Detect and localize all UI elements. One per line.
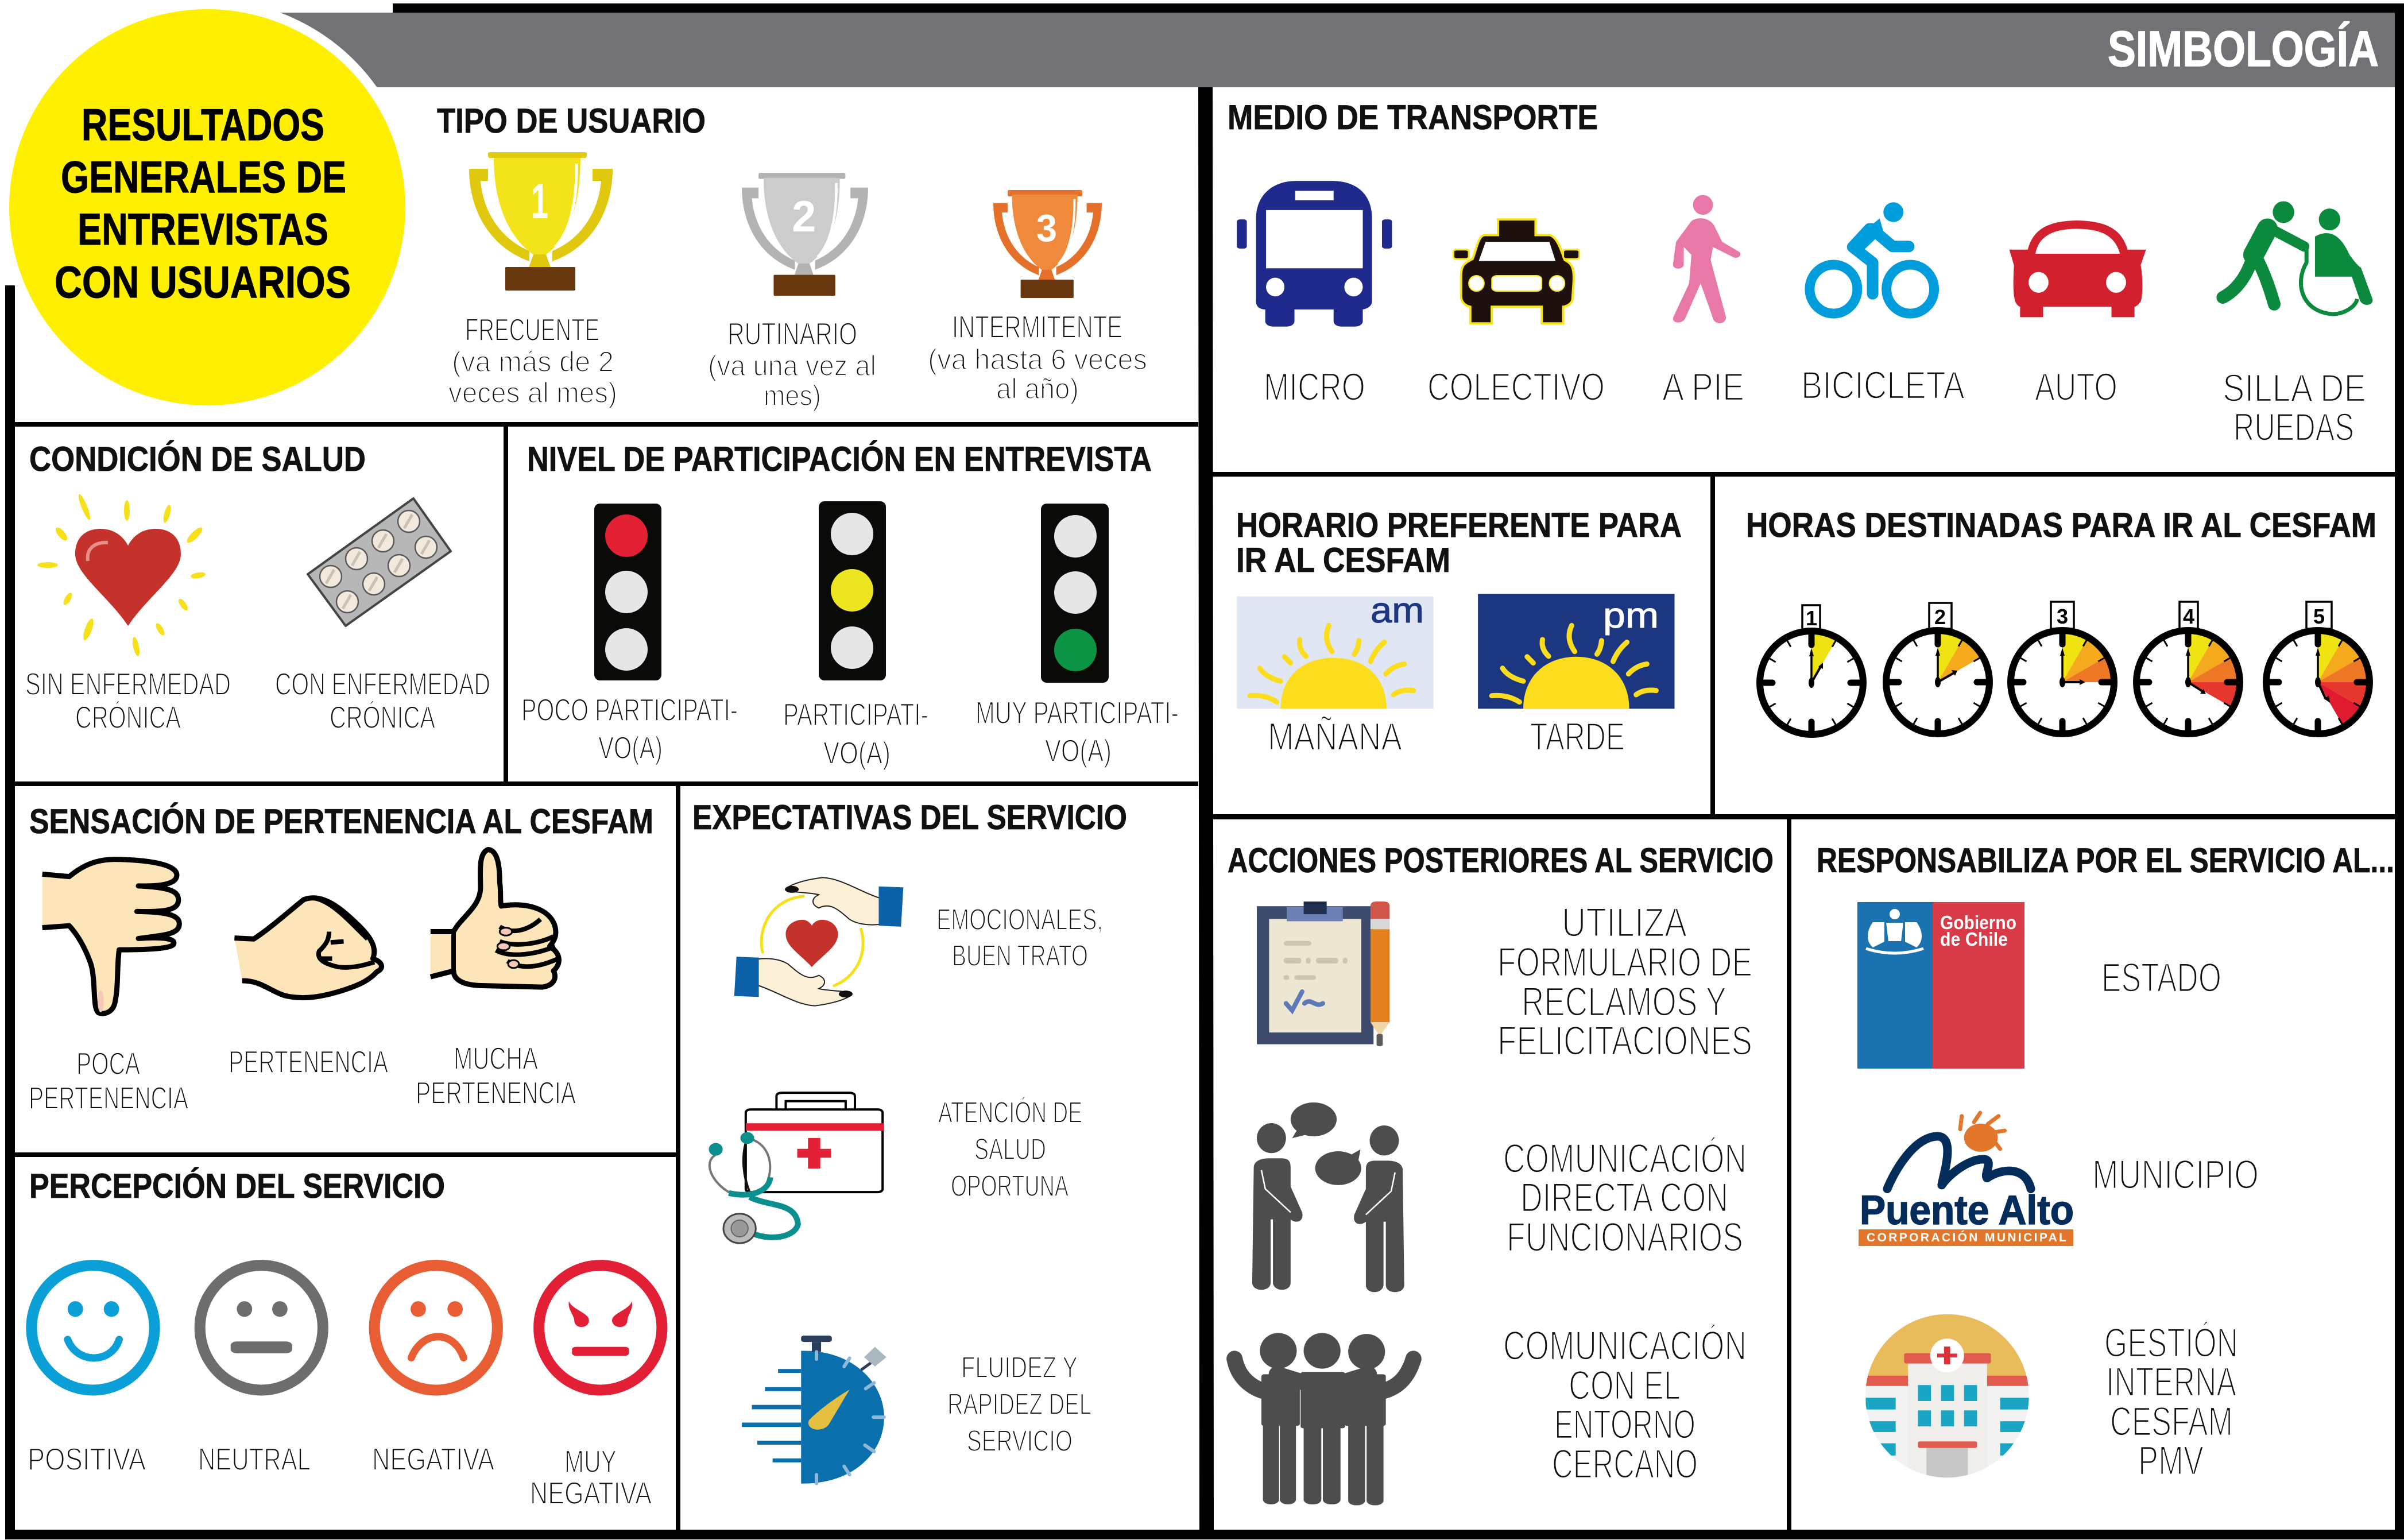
panel: horas destinadas xyxy=(1715,477,2395,814)
icon: morning sun card xyxy=(1237,591,1434,709)
label: comunicación directa xyxy=(1503,1136,1747,1260)
label: sin enfermedad crónica xyxy=(25,666,231,735)
icon: two people talking xyxy=(1252,1102,1404,1292)
icon: clock 3 hours: 3 xyxy=(2057,605,2068,628)
icon: clock 2 hours xyxy=(1886,603,1989,734)
icon: puente alto logo: CORPORACIÓN MUNICIPAL xyxy=(1867,1231,2066,1244)
label: participativo xyxy=(783,697,928,771)
icon: neutral face xyxy=(200,1266,323,1390)
icon: taxi xyxy=(1453,219,1580,323)
label: gestión interna cesfam pmv xyxy=(2104,1321,2238,1484)
label: poca pertenencia xyxy=(29,1046,188,1116)
label: atención de salud oportuna: OPORTUNA xyxy=(951,1170,1069,1203)
icon: car xyxy=(2010,220,2146,317)
panel: percepción del servicio xyxy=(15,1157,676,1530)
icon: bronze trophy: 3 xyxy=(1036,207,1057,250)
icon: stopwatch xyxy=(742,1336,887,1484)
label: silla de ruedas: RUEDAS xyxy=(2233,405,2354,449)
label: gestión interna cesfam pmv: INTERNA xyxy=(2106,1360,2236,1405)
label: con enfermedad crónica xyxy=(275,666,490,735)
label: municipio: MUNICIPIO xyxy=(2092,1152,2259,1198)
label: comunicación entorno: ENTORNO xyxy=(1554,1402,1695,1448)
panel: sensación de pertenencia xyxy=(15,786,676,1152)
label: intermitente: al año) xyxy=(996,373,1079,405)
label: comunicación directa: COMUNICACIÓN xyxy=(1503,1136,1747,1182)
icon: negative face xyxy=(374,1266,497,1390)
label: bicicleta: BICICLETA xyxy=(1801,363,1965,407)
icon: morning sun card: am xyxy=(1371,591,1424,630)
label: utiliza formulario: FORMULARIO DE xyxy=(1497,940,1752,985)
heading: condición de salud: CONDICIÓN DE SALUD xyxy=(29,440,366,478)
icon: silver trophy: 2 xyxy=(792,192,816,241)
label: negativa: NEGATIVA xyxy=(372,1441,494,1477)
label: muy negativa xyxy=(530,1444,652,1511)
icon: puente alto logo xyxy=(1859,1113,2074,1246)
heading: percepción del servicio: PERCEPCIÓN DEL SERVICIO xyxy=(29,1167,445,1205)
label: utiliza formulario: FELICITACIONES xyxy=(1497,1019,1752,1064)
icon: clock 3 hours xyxy=(2011,602,2114,734)
icon: bronze trophy xyxy=(993,190,1102,298)
title badge: resultados generales: ENTREVISTAS xyxy=(78,204,328,254)
label: mucha pertenencia: PERTENENCIA xyxy=(416,1075,576,1110)
icon: pedestrian xyxy=(1673,195,1740,323)
panel: condición de salud xyxy=(15,427,504,781)
label: fluidez y rapidez del servicio: SERVICIO xyxy=(967,1425,1073,1458)
heading: horario preferente para ir al cesfam xyxy=(1236,506,1682,579)
icon: traffic light red xyxy=(594,504,661,680)
icon: gold trophy xyxy=(469,152,613,291)
icon: hospital badge xyxy=(1865,1314,2029,1478)
label: poco participativo xyxy=(521,692,738,765)
label: gestión interna cesfam pmv: PMV xyxy=(2138,1438,2204,1484)
label: pertenencia: PERTENENCIA xyxy=(229,1044,388,1079)
label: poca pertenencia: PERTENENCIA xyxy=(29,1080,188,1116)
label: gestión interna cesfam pmv: CESFAM xyxy=(2110,1399,2233,1445)
icon: clock 1 hour: 1 xyxy=(1806,606,1817,630)
label: rutinario: (va una vez al xyxy=(708,350,876,382)
title badge: resultados generales: GENERALES DE xyxy=(61,152,346,202)
label: intermitente xyxy=(928,309,1147,405)
label: con enfermedad crónica: CON ENFERMEDAD xyxy=(275,666,490,702)
label: frecuente: (va más de 2 xyxy=(452,346,614,378)
label: utiliza formulario: UTILIZA xyxy=(1562,900,1687,946)
label: mucha pertenencia: MUCHA xyxy=(454,1040,538,1076)
icon: traffic light yellow xyxy=(819,501,886,680)
icon: afternoon sun card xyxy=(1478,594,1675,709)
label: emocionales, buen trato xyxy=(936,903,1103,973)
label: auto: AUTO xyxy=(2035,365,2117,409)
label: fluidez y rapidez del servicio xyxy=(947,1351,1091,1458)
title badge: resultados generales xyxy=(0,0,415,415)
label: tarde: TARDE xyxy=(1530,715,1625,759)
label: comunicación directa: FUNCIONARIOS xyxy=(1507,1215,1743,1260)
icon: pill blister xyxy=(308,498,451,626)
label: poco participativo: POCO PARTICIPATI- xyxy=(521,692,738,728)
heading: expectativas del servicio: EXPECTATIVAS DEL SERVICIO xyxy=(692,798,1127,837)
heading: horario preferente para ir al cesfam: HORARIO PREFERENTE PARA xyxy=(1236,506,1682,544)
label: fluidez y rapidez del servicio: RAPIDEZ DEL xyxy=(947,1388,1091,1421)
label: participativo: PARTICIPATI- xyxy=(783,697,928,732)
icon: very negative face xyxy=(539,1266,662,1390)
label: rutinario: mes) xyxy=(764,380,821,412)
icon: medical kit and stethoscope xyxy=(709,1093,884,1243)
panel: horario preferente xyxy=(1213,477,1710,814)
panel: responsabiliza por el servicio xyxy=(1818,848,2393,1478)
icon: hands holding heart xyxy=(734,877,903,1006)
label: comunicación entorno: CERCANO xyxy=(1552,1442,1698,1487)
label: comunicación entorno: COMUNICACIÓN xyxy=(1503,1324,1747,1369)
label: comunicación directa: DIRECTA CON xyxy=(1520,1175,1728,1221)
icon: silver trophy xyxy=(742,173,868,296)
label: comunicación entorno: CON EL xyxy=(1569,1363,1681,1409)
label: emocionales, buen trato: EMOCIONALES, xyxy=(936,903,1103,937)
icon: afternoon sun card: pm xyxy=(1603,596,1659,636)
heading: sensación de pertenencia: SENSACIÓN DE PERTENENCIA AL CESFAM xyxy=(29,802,653,841)
icon: clock 4 hours xyxy=(2136,602,2240,734)
icon: traffic light green xyxy=(1041,504,1109,683)
label: muy negativa: NEGATIVA xyxy=(530,1475,652,1511)
label: muy participativo: MUY PARTICIPATI- xyxy=(975,695,1179,730)
heading: tipo de usuario: TIPO DE USUARIO xyxy=(437,102,706,140)
title badge: resultados generales: RESULTADOS xyxy=(82,99,324,150)
label: colectivo: COLECTIVO xyxy=(1427,365,1605,409)
label: mucha pertenencia xyxy=(416,1040,576,1110)
label: intermitente: (va hasta 6 veces xyxy=(928,343,1147,376)
panel: medio de transporte xyxy=(1213,87,2395,472)
icon: clock 2 hours: 2 xyxy=(1934,605,1946,629)
header bar: simbología xyxy=(230,13,2395,87)
label: con enfermedad crónica: CRÓNICA xyxy=(330,699,435,735)
heading: acciones posteriores: ACCIONES POSTERIORES AL SERVICIO xyxy=(1228,841,1774,880)
heading: medio de transporte: MEDIO DE TRANSPORTE xyxy=(1228,98,1598,137)
label: frecuente xyxy=(448,312,617,409)
panel: acciones posteriores al servicio xyxy=(1214,819,1787,1530)
icon: puente alto logo: Puente Alto xyxy=(1860,1188,2074,1233)
icon: cyclist xyxy=(1810,202,1934,314)
icon: clipboard and pencil xyxy=(1257,901,1389,1046)
label: poca pertenencia: POCA xyxy=(76,1046,140,1081)
label: atención de salud oportuna xyxy=(938,1096,1082,1203)
label: poco participativo: VO(A) xyxy=(598,730,663,765)
label: sin enfermedad crónica: SIN ENFERMEDAD xyxy=(25,666,231,702)
panel: nivel de participación en entrevista xyxy=(508,427,1198,781)
icon: gobierno de chile logo: de Chile xyxy=(1940,928,2008,950)
label: rutinario xyxy=(708,316,876,412)
icon: clock 5 hours: 5 xyxy=(2313,605,2325,628)
panel: tipo de usuario xyxy=(15,87,1198,422)
label: positiva: POSITIVA xyxy=(28,1441,146,1477)
label: mañana: MAÑANA xyxy=(1268,715,1403,759)
label: micro: MICRO xyxy=(1264,365,1365,409)
label: participativo: VO(A) xyxy=(823,735,891,771)
label: fluidez y rapidez del servicio: FLUIDEZ Y xyxy=(961,1351,1078,1384)
label: neutral: NEUTRAL xyxy=(198,1441,311,1477)
icon: heart with rays xyxy=(37,493,206,657)
label: sin enfermedad crónica: CRÓNICA xyxy=(75,699,181,735)
icon: bus xyxy=(1237,181,1392,327)
icon: clock 4 hours: 4 xyxy=(2183,605,2194,628)
title badge: resultados generales: CON USUARIOS xyxy=(55,257,351,307)
label: silla de ruedas: SILLA DE xyxy=(2223,366,2366,410)
label: silla de ruedas xyxy=(2223,366,2366,449)
icon: gold trophy: 1 xyxy=(531,174,548,229)
icon: group of three people xyxy=(1234,1333,1414,1505)
label: estado: ESTADO xyxy=(2101,955,2221,1001)
label: intermitente: INTERMITENTE xyxy=(952,309,1122,345)
icon: thumb up xyxy=(431,850,559,987)
icon: clock 1 hour xyxy=(1760,605,1863,734)
label: atención de salud oportuna: ATENCIÓN DE xyxy=(938,1096,1082,1129)
icon: wheelchair with helper xyxy=(2223,201,2372,314)
label: muy negativa: MUY xyxy=(564,1444,617,1479)
icon: gobierno de chile logo: Gobierno xyxy=(1940,912,2016,933)
icon: positive face xyxy=(32,1266,154,1390)
label: muy participativo: VO(A) xyxy=(1045,733,1112,768)
label: rutinario: RUTINARIO xyxy=(727,316,857,351)
label: comunicación entorno xyxy=(1503,1324,1747,1487)
label: emocionales, buen trato: BUEN TRATO xyxy=(952,939,1088,973)
label: frecuente: veces al mes) xyxy=(448,377,617,409)
panel: expectativas del servicio xyxy=(680,786,1199,1530)
icon: thumb down xyxy=(42,860,179,1013)
icon: fist xyxy=(234,898,382,998)
label: frecuente: FRECUENTE xyxy=(465,312,599,347)
icon: clock 5 hours xyxy=(2266,602,2370,734)
label: gestión interna cesfam pmv: GESTIÓN xyxy=(2104,1321,2238,1366)
label: utiliza formulario xyxy=(1497,900,1752,1064)
label: muy participativo xyxy=(975,695,1179,768)
label: atención de salud oportuna: SALUD xyxy=(974,1133,1046,1166)
heading: nivel de participación: NIVEL DE PARTICIPACIÓN EN ENTREVISTA xyxy=(527,440,1152,478)
label: utiliza formulario: RECLAMOS Y xyxy=(1522,980,1726,1025)
label: a pie: A PIE xyxy=(1662,365,1744,409)
heading: horario preferente para ir al cesfam: IR AL CESFAM xyxy=(1236,541,1450,579)
icon: gobierno de chile logo xyxy=(1857,902,2024,1069)
